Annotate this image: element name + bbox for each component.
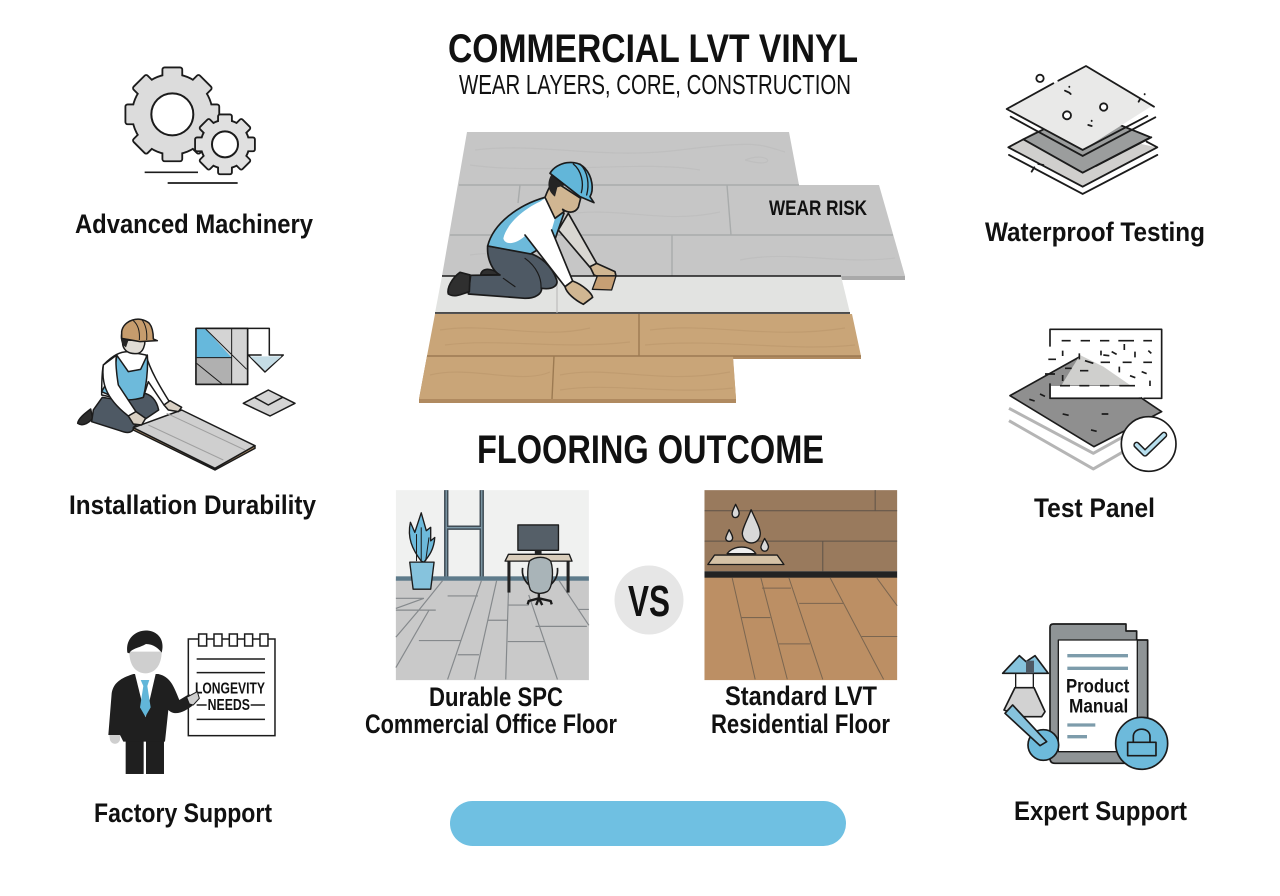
hard hat — [550, 162, 594, 203]
icon: product manual: Product — [1066, 676, 1130, 697]
legs — [126, 733, 144, 774]
check badge — [1121, 417, 1176, 471]
hair — [548, 174, 566, 197]
head and neck — [545, 182, 581, 218]
label: factory support: Factory Support — [94, 798, 272, 828]
title: COMMERCIAL LVT VINYL — [448, 27, 858, 71]
panel: residential floor — [704, 490, 897, 680]
dashed panel — [1050, 329, 1162, 398]
icon: businessman with notepad: NEEDS — [208, 697, 250, 714]
caption: standard LVT: Residential Floor — [711, 709, 890, 739]
shirt — [135, 674, 156, 717]
tie — [140, 680, 151, 717]
grey sheet — [1010, 357, 1162, 447]
notepad — [188, 639, 275, 736]
icon: test panel with check — [1009, 329, 1176, 471]
diagram square — [196, 328, 248, 384]
face and hair — [129, 652, 162, 673]
vest — [102, 355, 148, 400]
torso and sleeves — [102, 352, 169, 405]
caption: durable SPC: Durable SPC — [429, 682, 563, 712]
wood layer planks — [419, 314, 861, 403]
down arrow — [248, 328, 283, 372]
trousers — [468, 246, 557, 298]
panel: commercial office floor — [396, 490, 589, 680]
label: installation durability: Installation Durability — [69, 490, 316, 520]
hands — [187, 692, 199, 705]
sanding block — [592, 276, 616, 290]
small tile — [243, 390, 295, 416]
label: test panel: Test Panel — [1034, 493, 1155, 523]
central illustration: flooring layers and installer — [419, 132, 905, 403]
lower sheets — [1009, 408, 1123, 469]
icon: product manual: Manual — [1069, 697, 1128, 718]
binder — [1050, 624, 1148, 763]
icon: businessman with notepad: LONGEVITY — [195, 680, 265, 697]
tools — [1003, 656, 1048, 673]
vs badge — [614, 566, 684, 634]
page — [1058, 640, 1137, 752]
plant — [409, 513, 435, 589]
far arm — [558, 213, 597, 267]
wear risk label: WEAR RISK — [769, 197, 867, 220]
worker kneeling with sanding block — [448, 162, 616, 304]
desk — [505, 525, 572, 593]
heading: flooring outcome: FLOORING OUTCOME — [477, 428, 824, 472]
label: advanced machinery: Advanced Machinery — [75, 209, 313, 239]
icon: product manual — [1003, 624, 1168, 769]
hands — [128, 412, 146, 425]
hat — [122, 319, 157, 342]
vest — [488, 197, 564, 254]
lock badge — [1116, 717, 1168, 769]
head — [123, 340, 145, 354]
jacket — [108, 674, 193, 742]
caption: standard LVT — [711, 681, 890, 739]
caption: standard LVT: Standard LVT — [725, 681, 877, 711]
icon: gears — [126, 68, 254, 183]
water drops on shelf — [708, 504, 784, 564]
far hand — [590, 263, 616, 276]
white core layer — [435, 276, 850, 313]
window frame — [446, 490, 482, 577]
blue pill button — [450, 801, 846, 846]
boot — [78, 409, 93, 425]
near shoe — [448, 272, 470, 296]
vs badge: VS — [628, 577, 670, 626]
grey wear layer planks — [442, 132, 905, 280]
plank — [133, 428, 255, 470]
trousers — [92, 393, 159, 432]
label: expert support: Expert Support — [1014, 796, 1187, 826]
far shoe — [481, 269, 501, 275]
near hand — [565, 281, 593, 304]
shirt front and sleeve — [503, 198, 573, 287]
office chair — [522, 557, 558, 605]
near sleeve — [103, 355, 136, 416]
icon: stacked waterproof layers — [1007, 66, 1157, 194]
icon: businessman with notepad — [108, 631, 275, 774]
subtitle: WEAR LAYERS, CORE, CONSTRUCTION — [459, 69, 851, 100]
caption: durable SPC: Commercial Office Floor — [365, 709, 617, 739]
hair — [121, 333, 128, 347]
icon: installer with plank and diagram — [78, 319, 295, 470]
label: waterproof testing: Waterproof Testing — [985, 217, 1205, 247]
caption: durable SPC — [365, 682, 617, 739]
